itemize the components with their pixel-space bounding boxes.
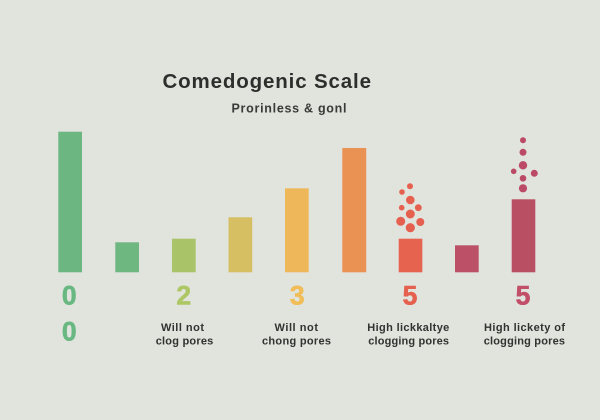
label: will not chong pores: chong pores	[262, 336, 331, 348]
label: will not clog pores: Will not	[161, 322, 204, 334]
scale number 0: 0	[62, 281, 77, 311]
bar 2	[115, 242, 139, 272]
second number 0: 0	[62, 317, 77, 347]
label: high lickety of clogging pores	[484, 322, 565, 348]
title: Comedogenic Scale	[162, 70, 371, 93]
label: will not chong pores	[262, 322, 331, 348]
label: high lickety of clogging pores: High lickety of	[484, 322, 565, 334]
bar 8	[455, 245, 479, 272]
scale number 5 crimson: 5	[516, 281, 530, 311]
label: will not clog pores: clog pores	[156, 336, 213, 348]
label: high lickkaltye clogging pores: High lickkaltye	[367, 322, 449, 334]
bar chart	[58, 132, 535, 272]
bar 9	[512, 199, 535, 272]
label: will not chong pores: Will not	[274, 322, 318, 334]
bar 1	[58, 132, 82, 272]
icon: orange-red pore dots	[396, 183, 424, 232]
scale number 5 orange: 5	[403, 281, 417, 311]
scale number 3: 3	[290, 281, 305, 311]
bar 6	[342, 148, 366, 272]
label: high lickkaltye clogging pores: clogging pores	[368, 336, 449, 348]
label: will not clog pores	[156, 322, 213, 348]
bar 4	[228, 217, 252, 272]
icon: crimson pore dots	[511, 137, 538, 192]
label: high lickety of clogging pores: clogging pores	[484, 336, 565, 348]
bar 5	[285, 188, 309, 272]
bar 3	[172, 239, 196, 272]
subtitle: Prorinless & gonl	[232, 102, 346, 116]
bar 7	[399, 239, 422, 272]
label: high lickkaltye clogging pores	[367, 322, 449, 348]
scale number 2: 2	[176, 281, 191, 311]
